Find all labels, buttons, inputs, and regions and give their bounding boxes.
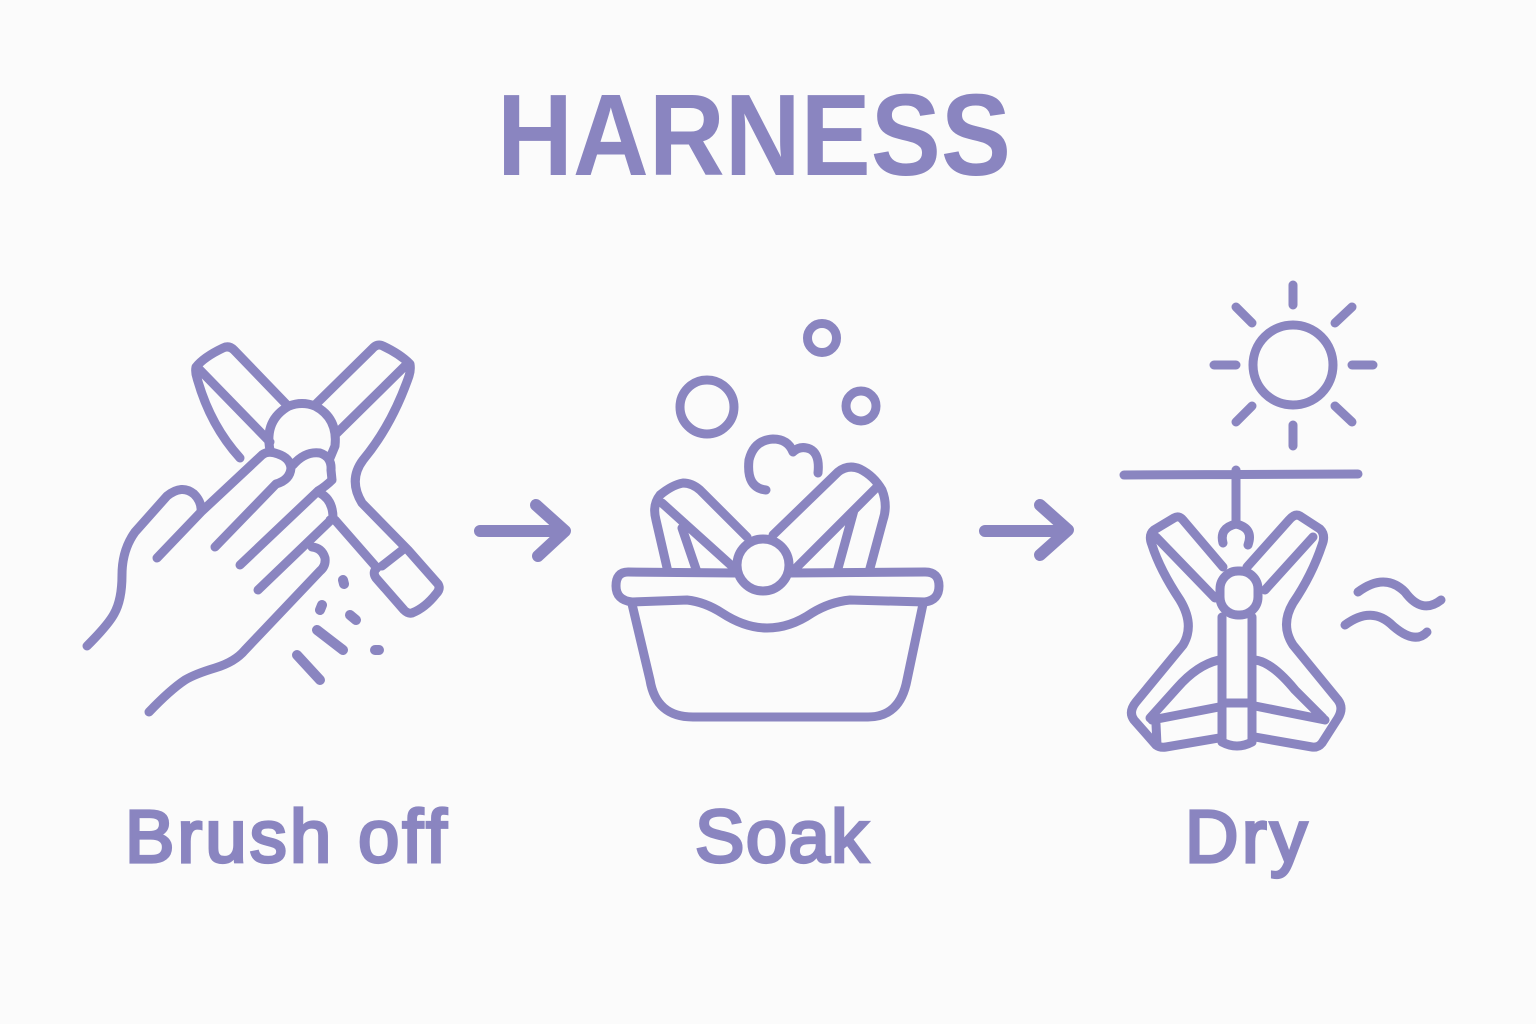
right strap in basin: [773, 467, 885, 572]
fingers: [240, 453, 333, 590]
left strap in basin: [655, 483, 747, 572]
little finger and wrist: [149, 547, 325, 712]
icon: hand brushing harness: [87, 345, 439, 712]
basin body: [632, 604, 923, 717]
basin rim: [616, 572, 939, 628]
sun: [1214, 285, 1373, 446]
right harness side: [1247, 515, 1341, 747]
lower right panel: [1255, 660, 1325, 720]
bubbles: [680, 324, 876, 434]
wind lines: [1345, 582, 1441, 637]
arrow: soak to dry: [985, 505, 1068, 555]
hand outline and thumb: [87, 452, 291, 646]
lower left panel: [1150, 660, 1219, 745]
harness ring: [269, 404, 335, 458]
label: Brush off: Brush off: [125, 795, 450, 878]
centre strap: [1222, 617, 1252, 746]
harness ring: [737, 539, 789, 591]
label: Soak: Soak: [695, 795, 870, 878]
right strap: [315, 345, 439, 613]
harness ring: [1220, 571, 1258, 615]
icon: basin with harness and bubbles: [616, 324, 939, 717]
falling dust: [297, 580, 379, 680]
drying line and hook: [1124, 470, 1358, 545]
label: Dry: Dry: [1185, 795, 1311, 878]
left harness side: [1131, 517, 1223, 747]
foam: [749, 439, 818, 490]
icon: harness drying under sun: [1124, 285, 1441, 747]
left strap: [196, 347, 287, 458]
arrow: brush to soak: [480, 505, 565, 556]
title: HARNESS: [497, 70, 1011, 200]
